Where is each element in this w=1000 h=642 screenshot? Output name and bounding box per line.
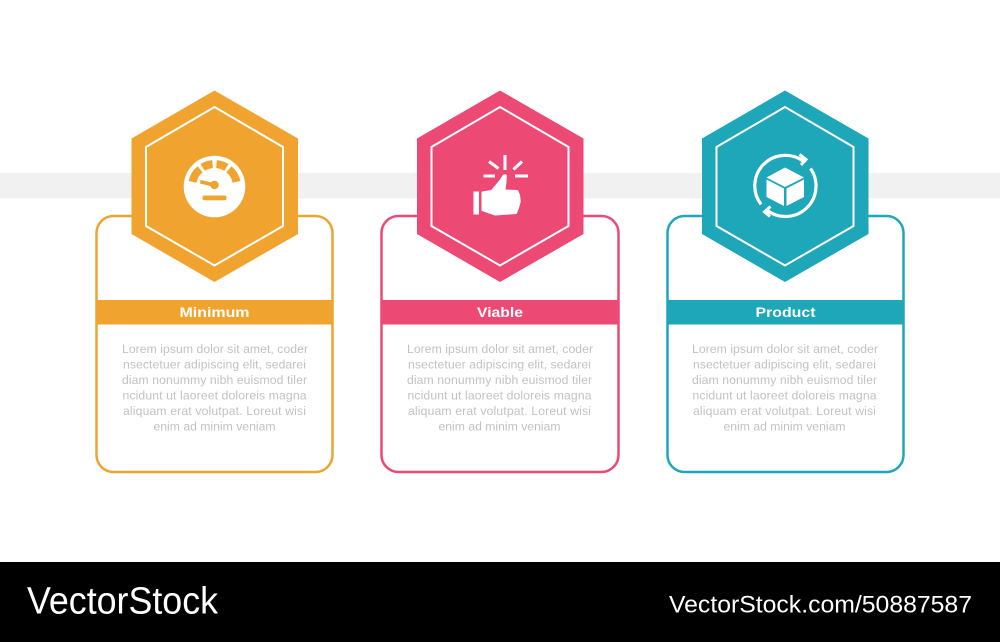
panel: product [668,90,904,472]
text block: minimum: diam nonummy nibh euismod tiler [122,373,307,387]
inner hexagon outline: viable [432,107,568,266]
footer image id text: VectorStock.com/50887587 [669,592,972,618]
heading: minimum: Minimum [180,304,250,320]
text block: viable [407,342,593,434]
card outline: product [668,216,904,472]
text block: product: diam nonummy nibh euismod tiler [692,373,877,387]
hexagon: viable [417,90,584,282]
text block: product: Lorem ipsum dolor sit amet, coder [692,342,878,356]
text block: viable: Lorem ipsum dolor sit amet, coder [407,342,593,356]
text block: product: ncidunt ut laoreet doloreis magna [692,388,877,402]
text block: viable: aliquam erat volutpat. Loreut wisi [408,404,591,418]
text block: product [692,342,878,434]
hexagon: minimum [132,90,298,282]
title band: viable [382,300,618,324]
text block: viable: nsectetuer adipiscing elit, sedarei [408,358,591,372]
text block: minimum: aliquam erat volutpat. Loreut wisi [123,404,306,418]
text block: minimum: enim ad minim veniam [154,420,276,434]
text block: minimum: nsectetuer adipiscing elit, sedarei [123,358,306,372]
text block: minimum: Lorem ipsum dolor sit amet, coder [122,342,308,356]
heading: viable: Viable [477,304,523,320]
footer logo text: VectorStock [27,580,219,622]
inner hexagon outline: minimum [146,107,283,266]
text block: product: enim ad minim veniam [724,420,846,434]
text block: minimum [122,342,308,434]
hexagon: product [702,90,868,282]
heading: product: Product [756,304,816,320]
title band: minimum [96,300,332,324]
text block: viable: enim ad minim veniam [438,420,560,434]
text block: product: aliquam erat volutpat. Loreut wisi [693,404,876,418]
card outline: viable [382,216,618,472]
text block: viable: ncidunt ut laoreet doloreis magna [408,388,592,402]
title band: product [668,300,904,324]
panel: minimum [96,90,332,472]
icon: speedometer [184,156,245,217]
background band [0,173,1000,198]
text block: viable: diam nonummy nibh euismod tiler [407,373,592,387]
card outline: minimum [96,216,332,472]
icon: box with cycle arrows [755,154,816,216]
inner hexagon outline: product [716,107,854,266]
panel: viable [382,90,618,472]
text block: minimum: ncidunt ut laoreet doloreis magna [122,388,307,402]
footer bar [0,562,1000,642]
text block: product: nsectetuer adipiscing elit, sedarei [693,358,876,372]
icon: thumbs up [474,155,528,215]
